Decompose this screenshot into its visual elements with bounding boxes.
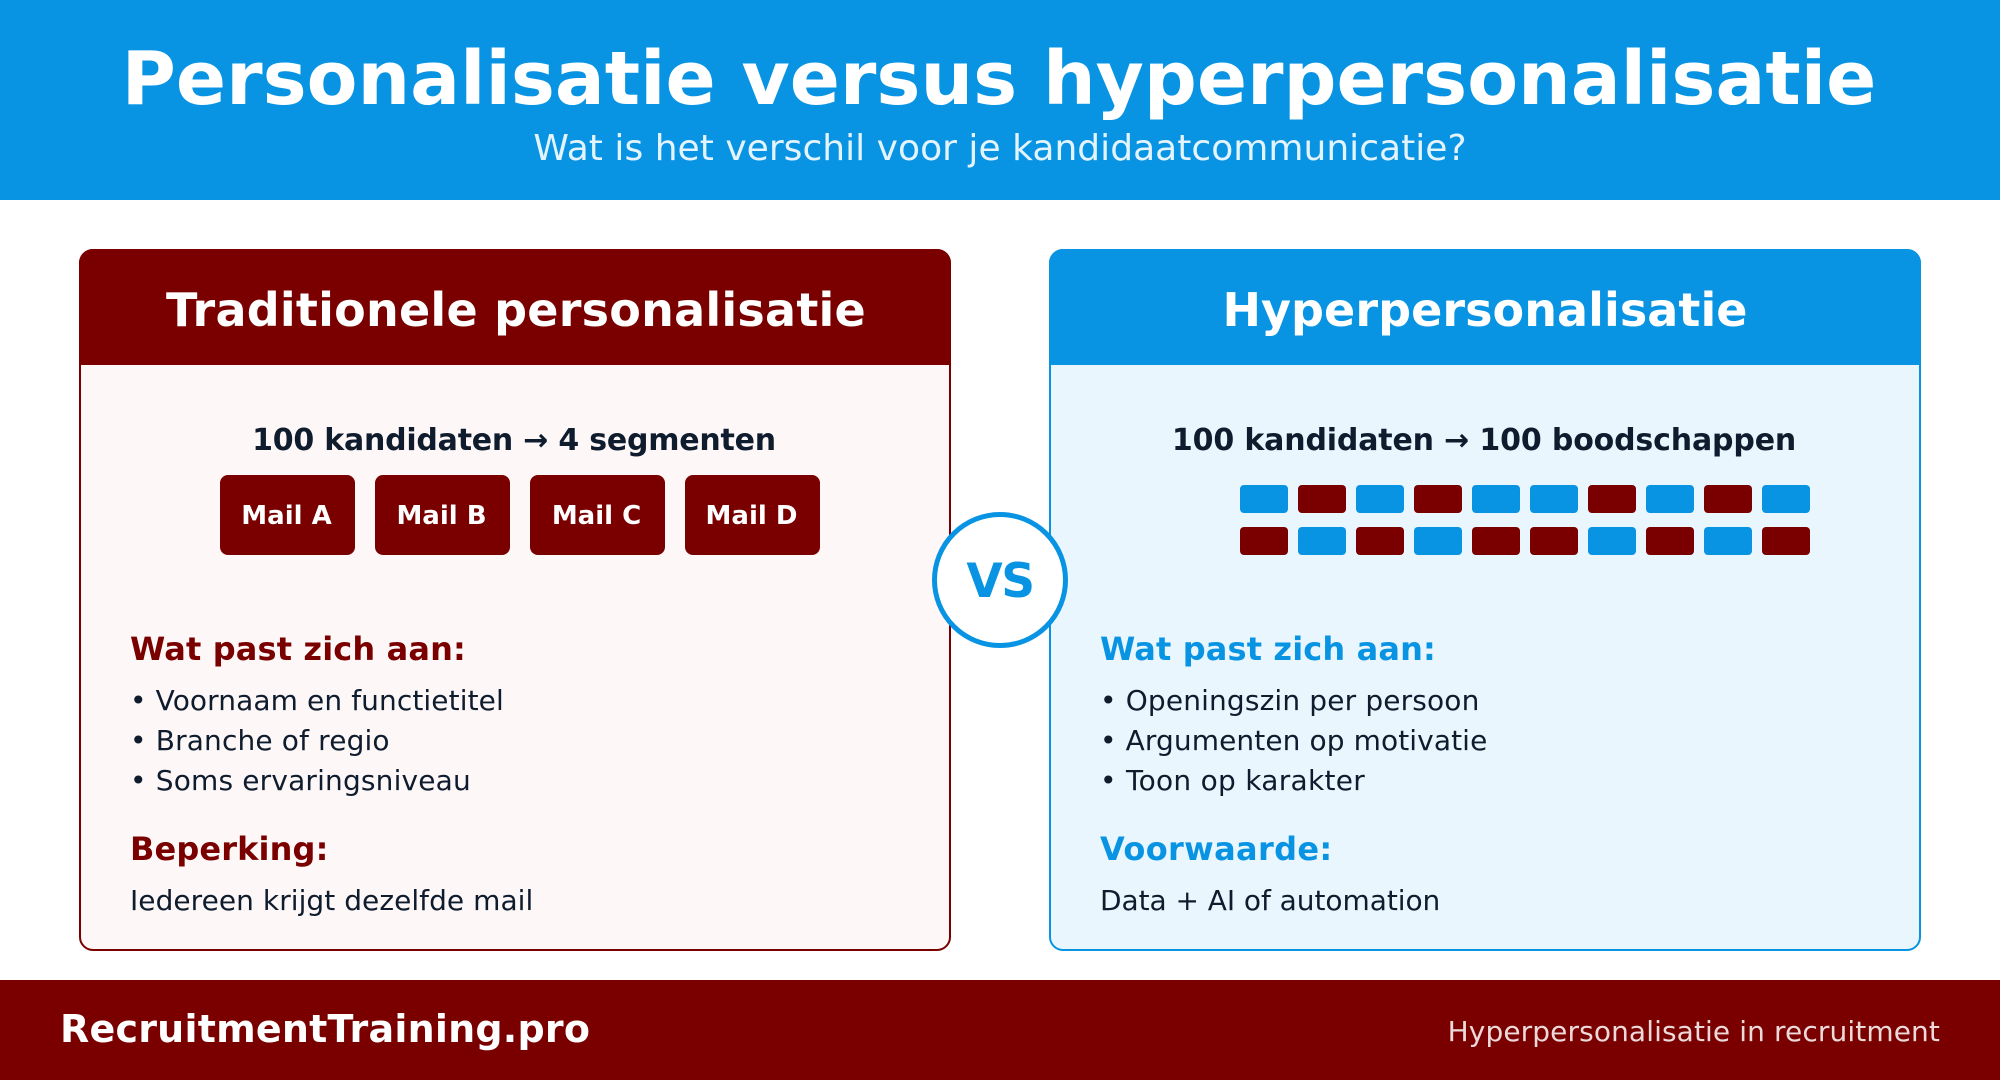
mail boxes [220,475,820,555]
subtitle: Wat is het verschil voor je kandidaatcommunicatie? [533,128,1467,169]
panel heading: Traditionele personalisatie [166,283,866,337]
adaptation heading: Wat past zich aan: [1100,630,1436,668]
mail boxes: Mail A [241,501,332,531]
adaptation list: • Toon op karakter [1100,764,1365,797]
panel heading bar [79,249,951,365]
limitation heading: Beperking: [130,830,329,868]
vs badge: VS [966,554,1034,609]
limitation text: Iedereen krijgt dezelfde mail [130,884,533,917]
adaptation list: • Voornaam en functietitel [130,684,504,717]
footer bar [0,980,2000,1080]
adaptation list: • Argumenten op motivatie [1100,724,1487,757]
title: Personalisatie versus hyperpersonalisatie [122,36,1876,122]
adaptation list [1100,684,1487,797]
mail boxes: Mail D [706,501,797,531]
segment label: 100 kandidaten → 4 segmenten [252,423,776,458]
adaptation list [130,684,504,797]
condition text: Data + AI of automation [1100,884,1440,917]
panel: traditionele personalisatie [79,249,951,951]
panel: hyperpersonalisatie [1049,249,1921,951]
adaptation list: • Soms ervaringsniveau [130,764,471,797]
adaptation list: • Openingszin per persoon [1100,684,1479,717]
panel heading bar [1049,249,1921,365]
message blocks grid [1240,485,1810,555]
adaptation heading: Wat past zich aan: [130,630,466,668]
message label: 100 kandidaten → 100 boodschappen [1172,423,1796,458]
footer tagline: Hyperpersonalisatie in recruitment [1448,1015,1940,1048]
panel heading: Hyperpersonalisatie [1222,283,1748,337]
mail boxes: Mail C [552,501,641,531]
footer brand: RecruitmentTraining.pro [60,1007,590,1051]
vs badge [932,512,1068,648]
adaptation list: • Branche of regio [130,724,390,757]
mail boxes: Mail B [396,501,487,531]
header banner [0,0,2000,200]
condition heading: Voorwaarde: [1100,830,1333,868]
